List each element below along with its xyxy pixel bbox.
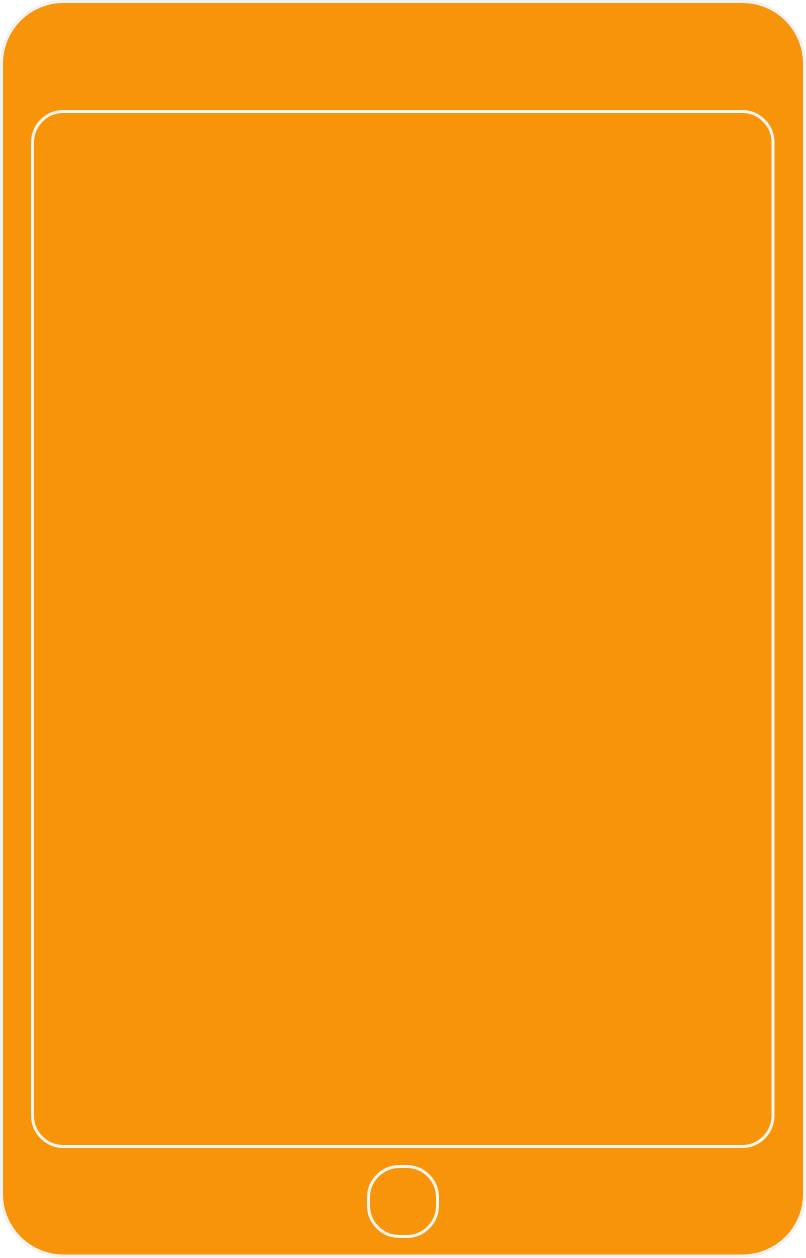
home button (368, 1166, 438, 1236)
tablet screen outline (32, 112, 773, 1146)
